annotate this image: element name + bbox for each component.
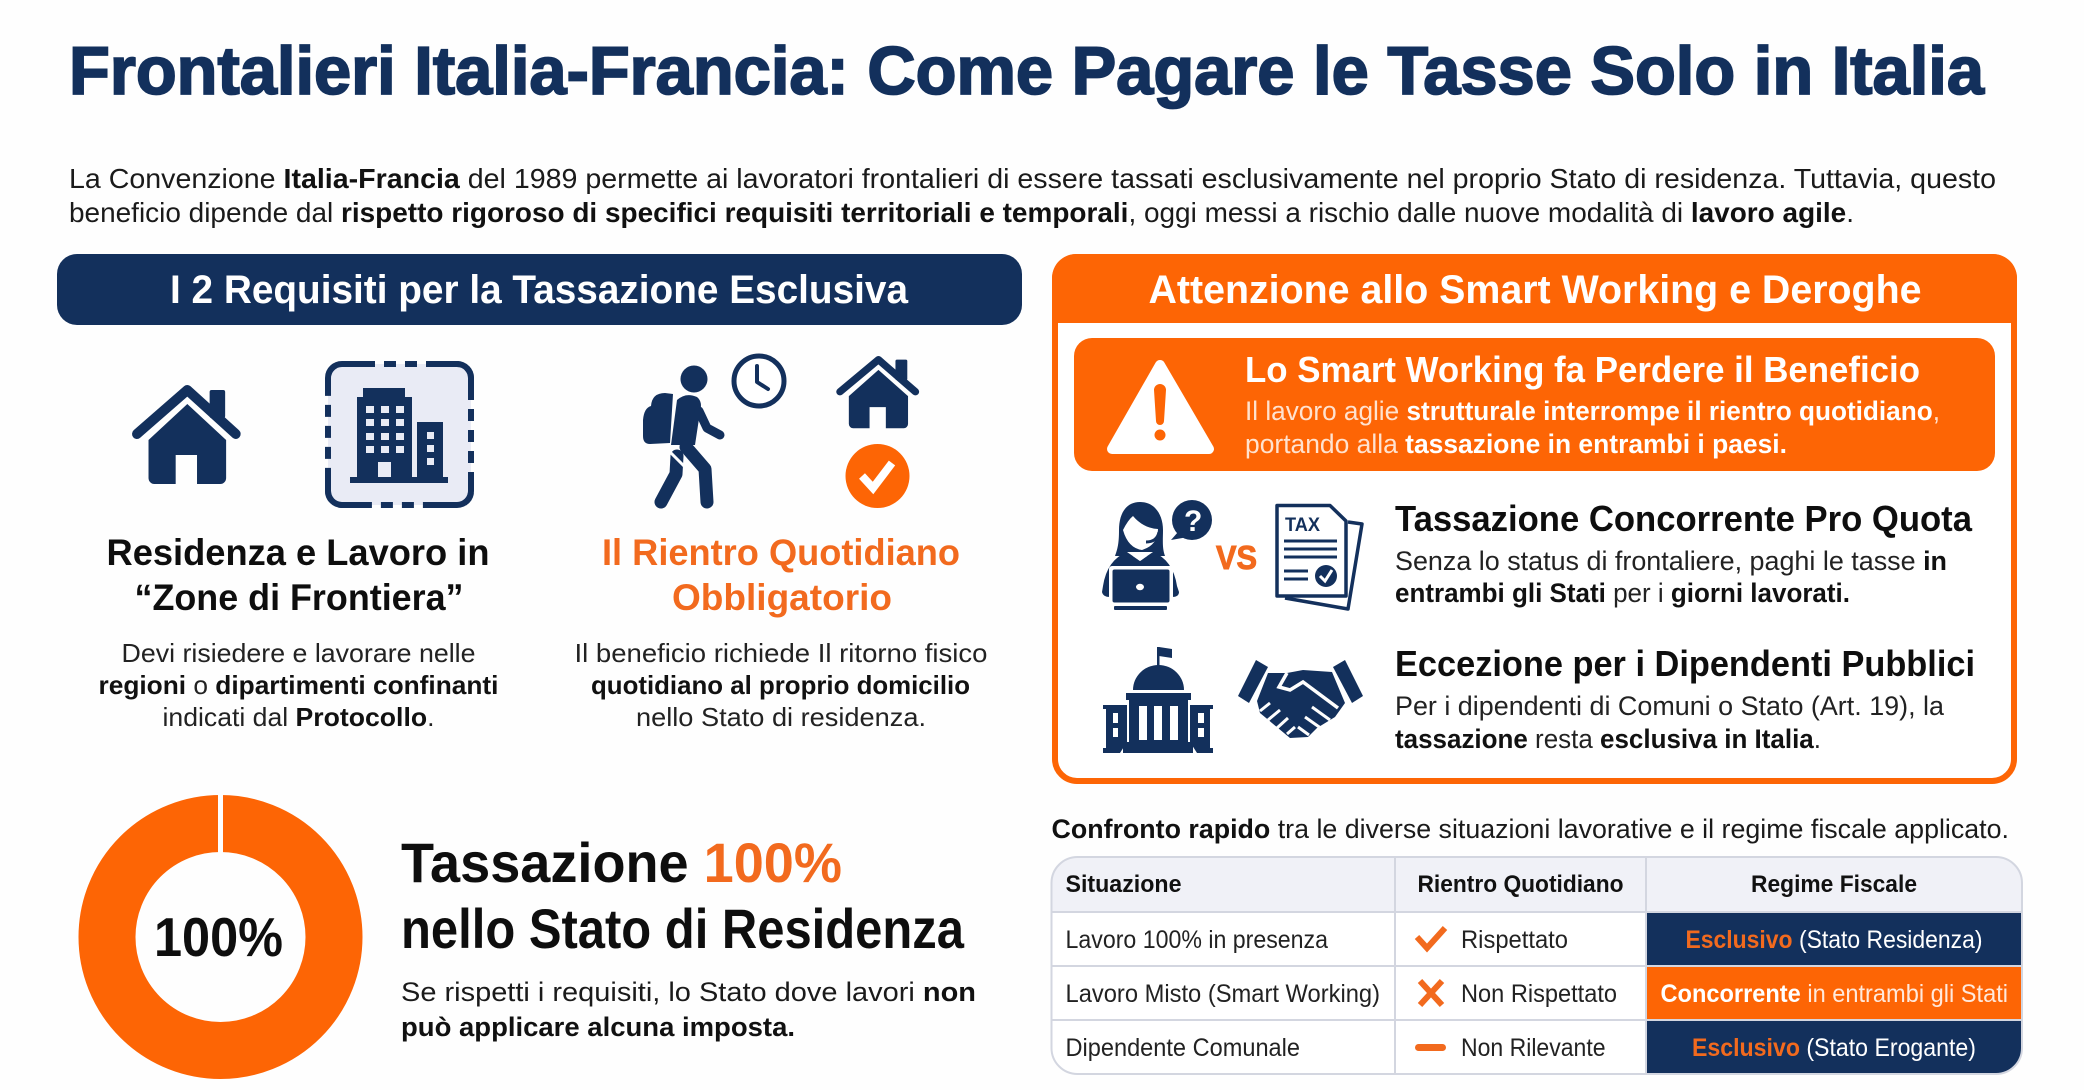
- donut chart: 100%: [107, 793, 334, 1050]
- requirement 2 text: Il beneficio richiede Il ritorno fisico: [574, 638, 988, 668]
- table row: comunale: Dipendente Comunale: [1066, 1034, 1300, 1062]
- callout: tassazione 100%: Tassazione 100%: [401, 831, 842, 894]
- callout: tassazione 100%: nello Stato di Residenza: [401, 897, 965, 960]
- comparison table: [1052, 857, 2022, 1074]
- heading: requisiti: I 2 Requisiti per la Tassazione Esclusiva: [170, 268, 909, 312]
- table row: misto: Non Rispettato: [1461, 980, 1617, 1008]
- table row: misto: [1066, 980, 2008, 1008]
- donut chart: 100%: 100%: [154, 906, 283, 968]
- intro text: beneficio dipende dal rispetto rigoroso di specifici requisiti territoriali e temporali, oggi messi a rischio dalle nuove modalità di lavoro agile.: [69, 197, 1854, 228]
- table header: Regime Fiscale: [1751, 871, 1917, 898]
- table row: misto: Lavoro Misto (Smart Working): [1066, 980, 1380, 1008]
- icon: clock: [734, 356, 784, 406]
- row 1 text: [1395, 546, 1947, 608]
- table header: Situazione: [1066, 871, 1182, 898]
- row 2 text: Per i dipendenti di Comuni o Stato (Art. 19), la: [1395, 691, 1945, 721]
- table row: presenza: [1066, 926, 1982, 954]
- panel: requisiti: [57, 254, 1022, 732]
- title: Frontalieri Italia-Francia: Come Pagare le Tasse Solo in Italia: [69, 33, 1985, 109]
- icon: government building: [1103, 647, 1213, 753]
- requirement 1 text: Devi risiedere e lavorare nelle: [122, 638, 476, 668]
- intro text: [69, 163, 1996, 228]
- table row: misto: Concorrente in entrambi gli Stati: [1660, 980, 2008, 1008]
- icon: handshake: [1238, 660, 1363, 738]
- callout: tassazione 100%: può applicare alcuna imposta.: [401, 1012, 795, 1042]
- callout: warning: Lo Smart Working fa Perdere il Beneficio: [1245, 349, 1920, 390]
- row 1 heading: Tassazione Concorrente Pro Quota: [1395, 498, 1973, 539]
- heading: smart working: Attenzione allo Smart Working e Deroghe: [1148, 268, 1922, 312]
- row 1 text: entrambi gli Stati per i giorni lavorati.: [1395, 578, 1850, 608]
- label: vs: VS: [1216, 539, 1257, 576]
- table row: comunale: [1066, 1034, 1976, 1062]
- requirement 2 text: quotidiano al proprio domicilio: [591, 670, 970, 700]
- icon: tax document: TAX: [1285, 515, 1320, 536]
- panel frame: [1055, 257, 2014, 781]
- callout: tassazione 100%: Se rispetti i requisiti, lo Stato dove lavori non: [401, 977, 976, 1007]
- table header: [1066, 871, 1917, 898]
- icon: commuter walking: [643, 366, 720, 502]
- requirement 2 heading: Obbligatorio: [672, 577, 892, 618]
- icon: remote worker with question: [1102, 500, 1212, 610]
- icon: tax document: [1277, 506, 1362, 609]
- heading: requisiti: [57, 254, 1022, 325]
- table row: presenza: Esclusivo (Stato Residenza): [1686, 926, 1982, 954]
- panel: smart working: [1052, 254, 2017, 781]
- callout: tassazione 100%: [401, 831, 976, 1042]
- requirement 1 text: regioni o dipartimenti confinanti: [98, 670, 499, 700]
- icon: orange check badge: [846, 444, 910, 508]
- table header: Rientro Quotidiano: [1418, 871, 1624, 898]
- requirement 2 heading: [602, 532, 960, 618]
- table caption: Confronto rapido tra le diverse situazioni lavorative e il regime fiscale applicato.: [1052, 814, 2009, 844]
- icon: home destination: [840, 360, 915, 428]
- row 2 text: tassazione resta esclusiva in Italia.: [1395, 724, 1821, 754]
- callout: warning: [1074, 338, 1995, 471]
- requirement 1 heading: [106, 532, 490, 618]
- requirement 1 heading: “Zone di Frontiera”: [134, 577, 464, 618]
- row 2 heading: Eccezione per i Dipendenti Pubblici: [1395, 643, 1975, 684]
- intro text: La Convenzione Italia-Francia del 1989 permette ai lavoratori frontalieri di essere tassati esclusivamente nel proprio Stato di residenza. Tuttavia, questo: [69, 163, 1996, 194]
- requirement 1 text: [98, 638, 499, 732]
- requirement 2 text: nello Stato di residenza.: [636, 702, 926, 732]
- callout: warning: portando alla tassazione in entrambi i paesi.: [1245, 429, 1787, 459]
- icon: office building in border zone: [328, 364, 471, 505]
- table row: presenza: Rispettato: [1461, 926, 1568, 954]
- heading: smart working: [1052, 254, 2017, 323]
- requirement 2 text: [574, 638, 988, 732]
- row 1 text: Senza lo status di frontaliere, paghi le tasse in: [1395, 546, 1947, 576]
- requirement 2 heading: Il Rientro Quotidiano: [602, 532, 960, 573]
- requirement 1 heading: Residenza e Lavoro in: [106, 532, 490, 573]
- callout: warning: Il lavoro aglie strutturale interrompe il rientro quotidiano,: [1245, 396, 1940, 426]
- table row: presenza: Lavoro 100% in presenza: [1066, 926, 1328, 954]
- requirement 1 text: indicati dal Protocollo.: [162, 702, 434, 732]
- table row: comunale: Non Rilevante: [1461, 1034, 1606, 1062]
- table row: comunale: Esclusivo (Stato Erogante): [1692, 1034, 1976, 1062]
- icon: house: [137, 390, 236, 484]
- icon: remote worker with question: ?: [1184, 505, 1202, 538]
- icon: warning triangle: [1112, 365, 1209, 449]
- row 2 text: [1395, 691, 1945, 754]
